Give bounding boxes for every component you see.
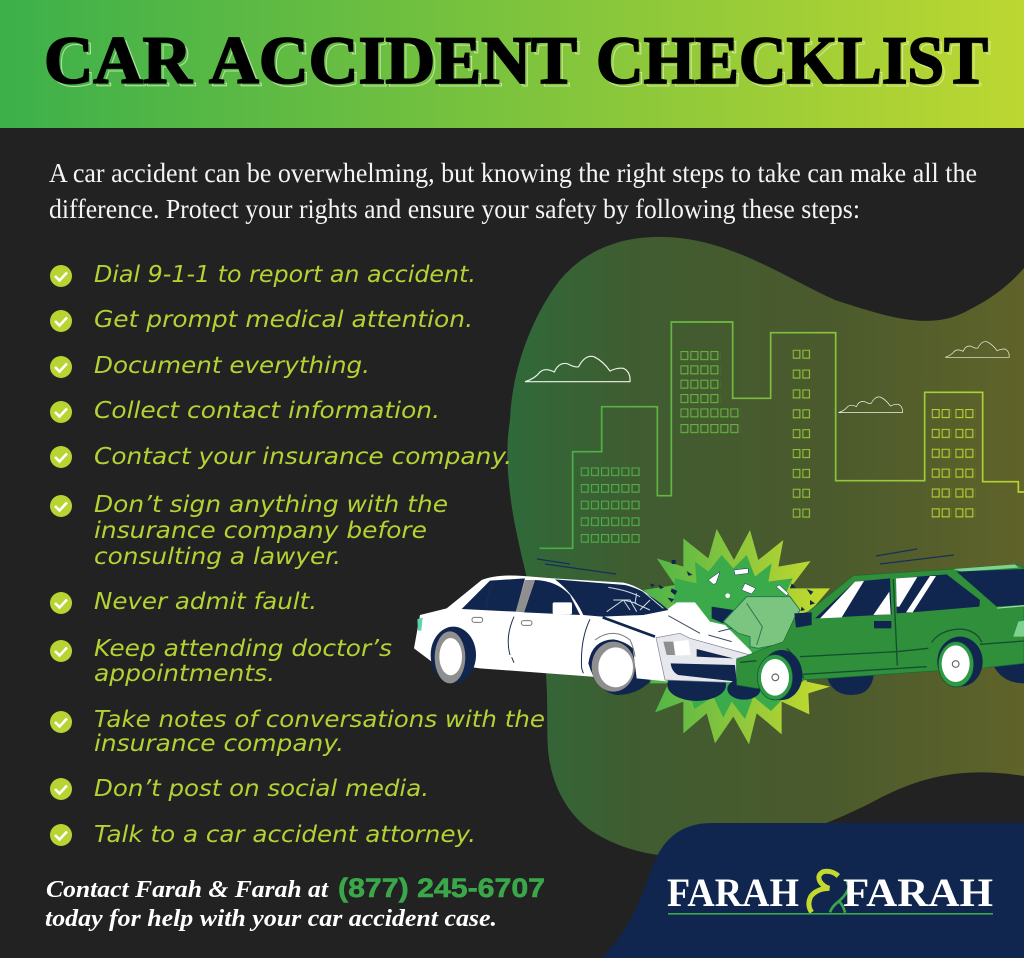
- logo: FARAH: [843, 870, 993, 915]
- green car windows: [815, 569, 1024, 637]
- front wheel green car: [757, 650, 802, 700]
- city skyline: [525, 322, 1024, 548]
- title: CAR: [47, 25, 196, 101]
- item: don't sign: [50, 490, 448, 570]
- hood crease: [603, 617, 655, 637]
- door handles: [472, 617, 532, 625]
- title: CHECKLIST: [596, 22, 988, 98]
- item: doctor's appointments: Keep attending doctor’s: [94, 634, 392, 662]
- contact call to action: [45, 873, 545, 932]
- logo: FARAH: [667, 870, 799, 915]
- title: CHECKLIST: [599, 25, 991, 101]
- white car pillar: [516, 580, 535, 612]
- rear wheel white car: [431, 627, 476, 683]
- crumpled hood: [723, 597, 800, 648]
- item: take notes: Take notes of conversations with the: [94, 705, 545, 733]
- item: don't sign: insurance company before: [94, 516, 427, 544]
- impact burst: [643, 529, 830, 744]
- white car body: [414, 575, 753, 683]
- phone number: (877) 245-6707: [338, 873, 545, 903]
- title: CAR: [44, 22, 193, 98]
- item: never admit fault: Never admit fault.: [94, 587, 317, 615]
- item: don't sign: consulting a lawyer.: [94, 542, 341, 570]
- green car body lines: [740, 579, 1024, 678]
- front bumper and headlight: [656, 633, 750, 683]
- background blob: [507, 237, 1024, 856]
- white car windows: [462, 578, 668, 617]
- item: dial 911: Dial 9-1-1 to report an accident.: [94, 260, 476, 288]
- rear wheel green car: [937, 637, 983, 687]
- title: ACCIDENT: [212, 25, 580, 101]
- item: social media: Don’t post on social media.: [94, 774, 429, 802]
- white car: [414, 575, 753, 701]
- taillight: [417, 617, 423, 631]
- contact call to action: today for help with your car accident case.: [45, 906, 497, 932]
- item: attorney: Talk to a car accident attorney.: [94, 820, 476, 848]
- logo ampersand: [809, 871, 853, 913]
- title: ACCIDENT: [209, 22, 577, 98]
- item: medical attention: Get prompt medical attention.: [94, 305, 473, 333]
- speed lines: [537, 549, 954, 574]
- intro text: difference. Protect your rights and ensure your safety by following these steps:: [49, 194, 860, 224]
- cracked windshield: [607, 587, 663, 612]
- fender arc: [595, 633, 635, 657]
- front wheel white car: [588, 639, 650, 695]
- green car: [727, 564, 1024, 700]
- logo panel: [601, 823, 1024, 958]
- logo: [667, 870, 993, 915]
- hood lines: [668, 616, 732, 642]
- body lines: [486, 583, 590, 673]
- intro text: A car accident can be overwhelming, but knowing the right steps to take can make all the: [49, 158, 977, 188]
- front fender: [633, 640, 668, 681]
- item: don't sign: Don’t sign anything with the: [94, 490, 448, 518]
- item: doctor's appointments: [50, 634, 392, 687]
- clouds: [525, 342, 1009, 413]
- title: [44, 22, 991, 101]
- item: contact information: Collect contact information.: [94, 396, 440, 424]
- green car underside: [727, 662, 1024, 700]
- debris: [650, 560, 815, 623]
- green car body: [737, 564, 1024, 690]
- building windows: [581, 350, 975, 544]
- checklist: [50, 260, 545, 848]
- item: insurance company: Contact your insurance company.: [94, 442, 512, 470]
- contact call to action: Contact Farah & Farah at: [46, 877, 329, 903]
- item: doctor's appointments: appointments.: [94, 659, 275, 687]
- item: take notes: insurance company.: [94, 729, 344, 757]
- side mirror: [553, 602, 572, 614]
- intro text: [49, 158, 977, 224]
- building outlines: [539, 322, 1024, 548]
- side mirror and handle: [794, 612, 891, 628]
- header banner: [0, 0, 1024, 128]
- roof highlight: [953, 564, 1018, 572]
- white car underside: [667, 669, 726, 701]
- item: document: Document everything.: [94, 351, 370, 379]
- item: take notes: [50, 705, 545, 757]
